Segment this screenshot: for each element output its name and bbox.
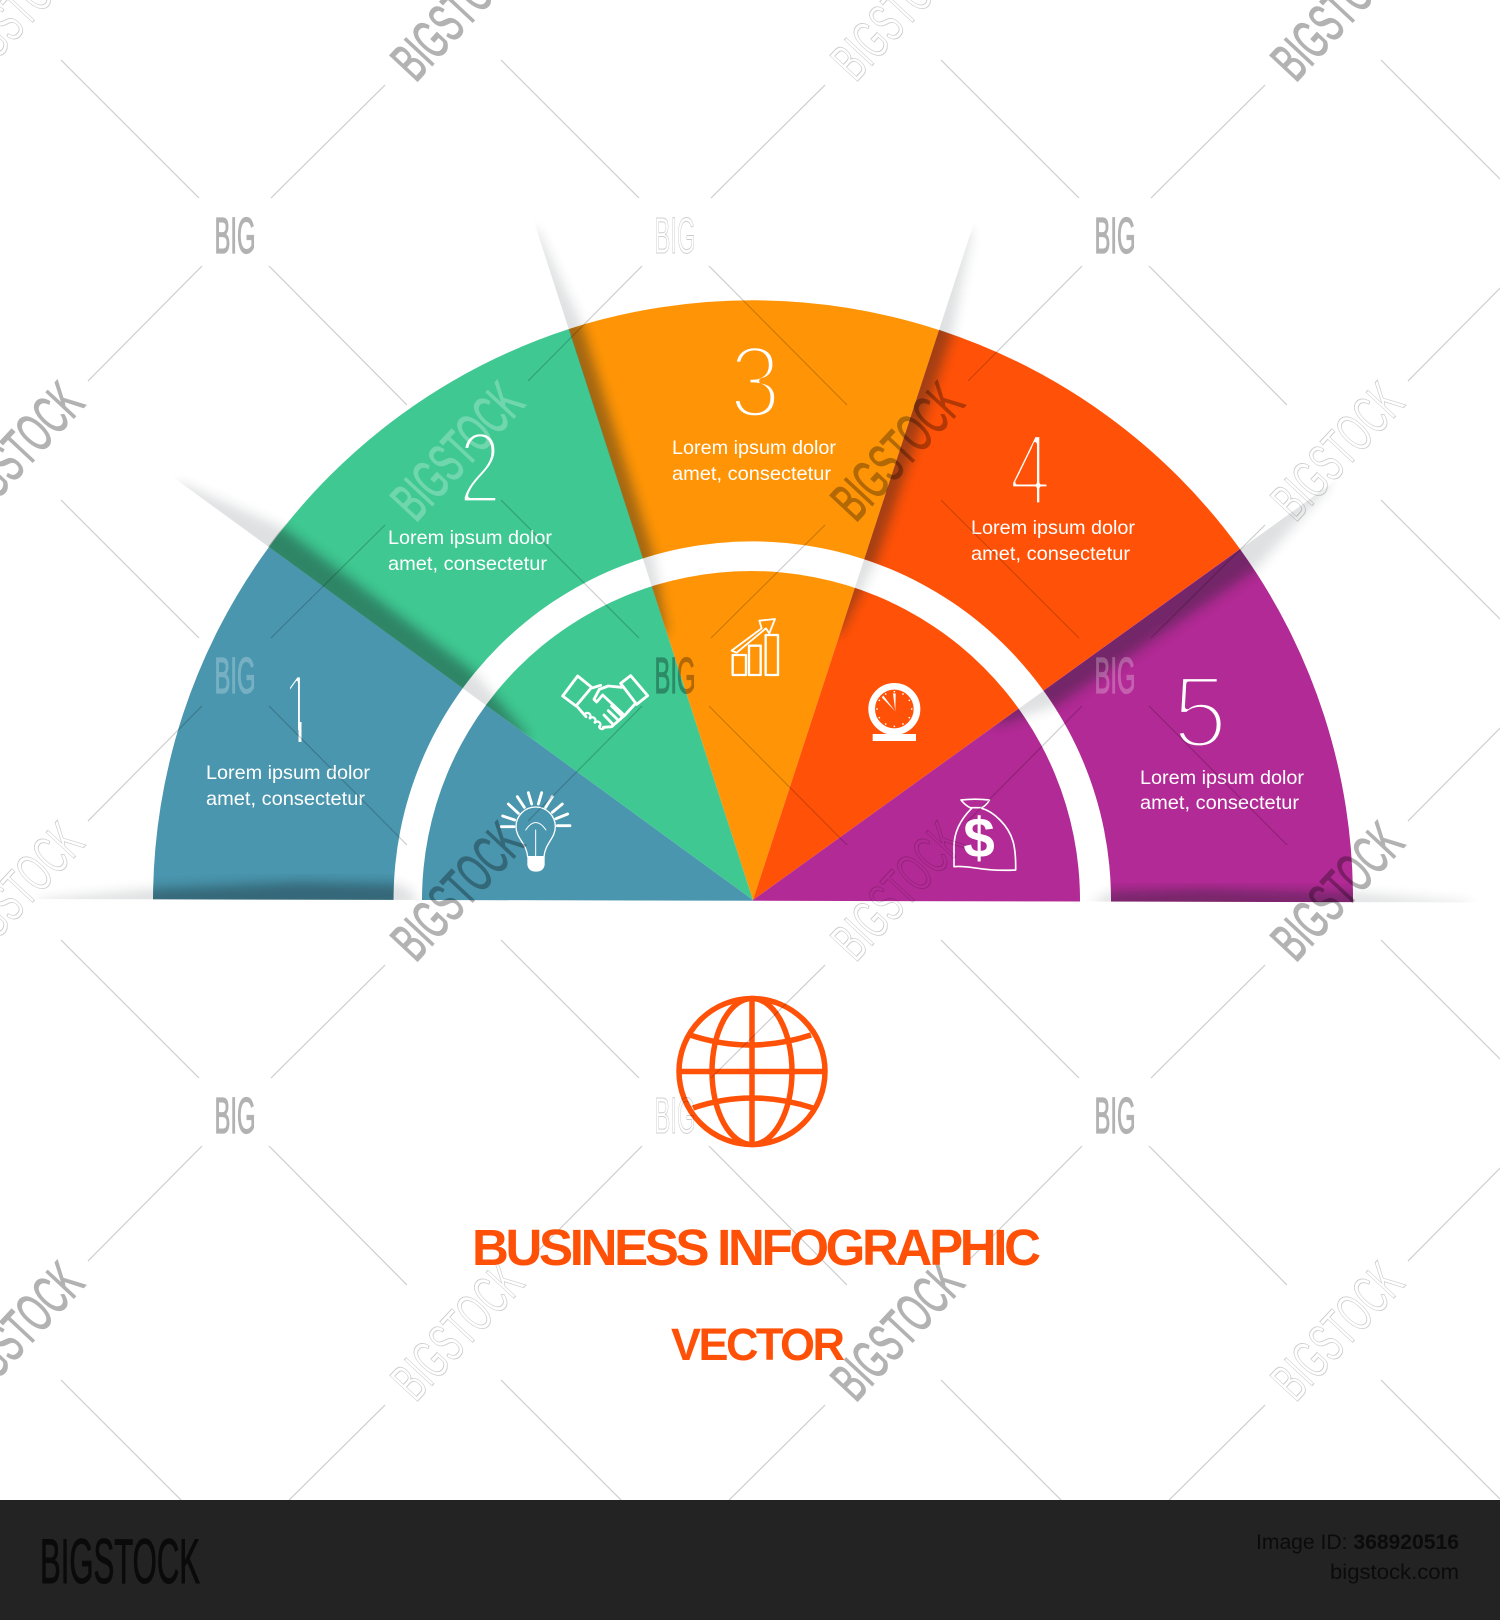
watermark: BIGSTOCK labels: BIGSTOCK <box>819 1250 975 1411</box>
footer url: bigstock.com <box>1330 1561 1459 1584</box>
icon: globe <box>679 998 825 1144</box>
number 4: 4 <box>1010 413 1050 527</box>
watermark: BIG labels <box>214 207 1136 1144</box>
segment 3 orange <box>569 300 939 900</box>
fold shadows on white <box>40 227 1470 908</box>
watermark: BIGSTOCK labels: BIGSTOCK <box>379 1250 535 1411</box>
semicircle segments <box>153 300 1353 906</box>
number 5: 5 <box>1173 655 1227 769</box>
number 2: 2 <box>459 412 501 526</box>
watermark: BIGSTOCK labels: BIGSTOCK <box>379 810 535 971</box>
text 2: Lorem ipsum dolor <box>388 527 553 549</box>
watermark: BIG labels: BIG <box>214 1087 256 1144</box>
text 5: amet, consectetur <box>1140 792 1300 814</box>
text: BIG <box>1094 207 1136 264</box>
number 1: 1 <box>284 654 312 768</box>
watermark: BIGSTOCK labels: BIGSTOCK <box>1259 810 1415 971</box>
panel 3 content <box>672 324 837 675</box>
watermark: BIGSTOCK labels: BIGSTOCK <box>819 810 975 971</box>
panel 1 content <box>206 654 570 872</box>
panel 2 content <box>388 412 648 729</box>
text 1: amet, consectetur <box>206 788 366 810</box>
watermark: BIGSTOCK labels: BIGSTOCK <box>1259 370 1415 531</box>
title: BUSINESS INFOGRAPHIC <box>472 1219 1041 1276</box>
fold shadows on colour <box>153 323 1353 902</box>
white ring <box>394 541 1111 906</box>
icon: money bag <box>954 799 1016 871</box>
subtitle: VECTOR <box>671 1319 845 1370</box>
segment 5 purple <box>753 549 1353 906</box>
watermark: BIG labels: BIG <box>654 1087 696 1144</box>
panel 5 content <box>954 655 1305 871</box>
segment 4 red-orange <box>753 330 1240 900</box>
watermark: BIGSTOCK labels: BIGSTOCK <box>819 370 975 531</box>
watermark: BIG labels: BIG <box>654 207 696 264</box>
text 3: amet, consectetur <box>672 463 832 485</box>
text 4: amet, consectetur <box>971 543 1131 565</box>
watermark: BIG labels: BIG <box>654 647 696 704</box>
watermark: BIGSTOCK labels: BIGSTOCK <box>379 370 535 531</box>
text 5: Lorem ipsum dolor <box>1140 767 1305 789</box>
icon: growth chart <box>732 619 778 675</box>
text: BIG <box>1094 1087 1136 1144</box>
text 2: amet, consectetur <box>388 553 548 575</box>
watermark: BIGSTOCK labels: BIGSTOCK <box>1259 1250 1415 1411</box>
image id: Image ID: 368920516 <box>1256 1531 1459 1554</box>
lower white sheet <box>0 899 1500 1500</box>
panel 4 content <box>872 413 1136 741</box>
footer bar <box>0 1500 1500 1620</box>
segment 1 blue <box>153 547 753 906</box>
text 4: Lorem ipsum dolor <box>971 517 1136 539</box>
icon: light bulb <box>501 793 570 872</box>
watermark: BIG labels: BIG <box>214 647 256 704</box>
number 1 <box>290 677 302 742</box>
watermark: BIG labels: BIG <box>214 207 256 264</box>
text: BIG <box>1094 647 1136 704</box>
icon: handshake <box>563 676 648 729</box>
number 3: 3 <box>729 324 781 439</box>
icon: money bag: $ <box>963 808 995 871</box>
text 3: Lorem ipsum dolor <box>672 437 837 459</box>
icon: clock <box>872 686 917 741</box>
text 1: Lorem ipsum dolor <box>206 762 371 784</box>
segment 2 green <box>269 329 753 900</box>
footer bar: BIGSTOCK <box>40 1527 200 1597</box>
